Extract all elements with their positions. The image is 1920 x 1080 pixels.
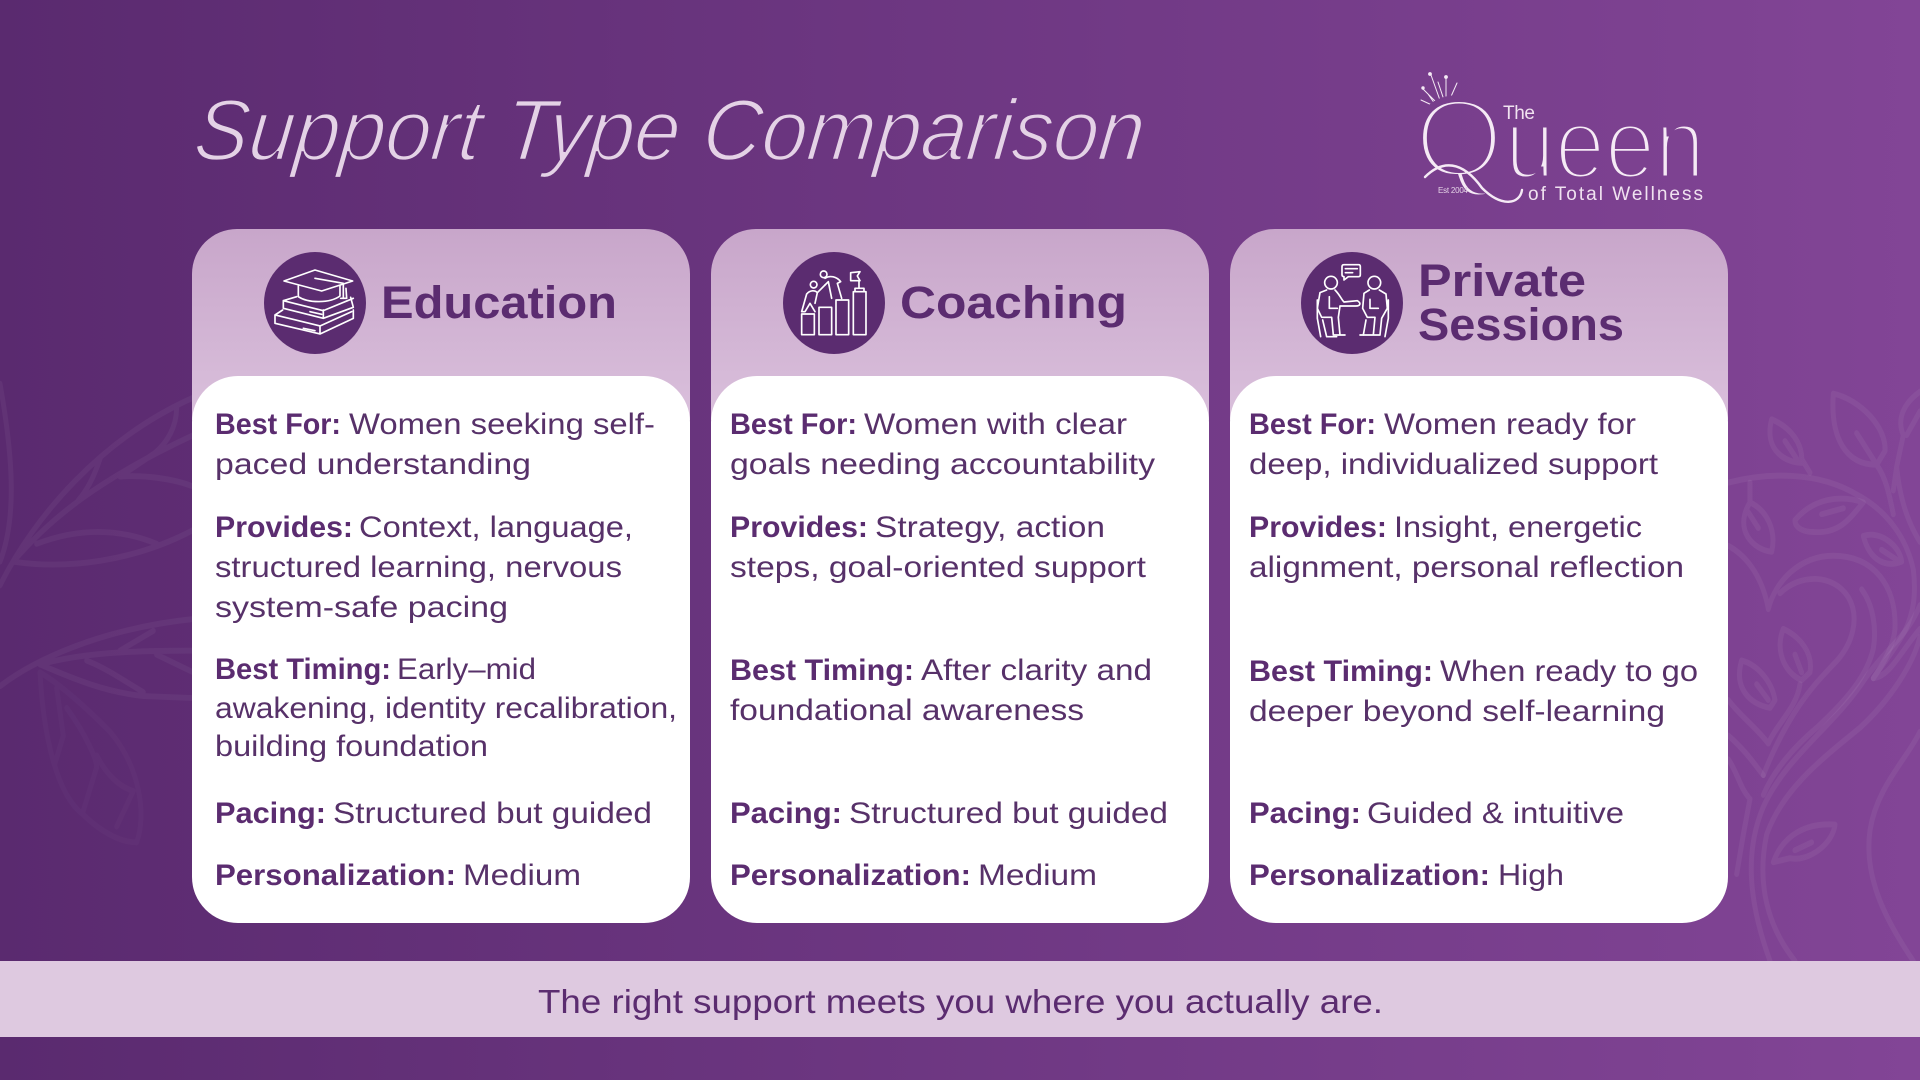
text block: private sessions details: Women ready for	[1384, 408, 1636, 441]
icon: books and graduation cap	[264, 252, 366, 354]
text block: private sessions details: deeper beyond self-learning	[1249, 695, 1665, 728]
logo wordmark Queen: Q	[1414, 76, 1504, 201]
text block: private sessions details: Provides:	[1249, 511, 1387, 544]
text block: education details: Personalization:	[215, 859, 456, 892]
text block: coaching details: foundational awareness	[730, 694, 1084, 727]
text block: coaching details: Best For:	[730, 408, 857, 441]
footer text: The right support meets you where you actually are.	[538, 983, 1383, 1020]
decorative botanical line art: right	[1728, 392, 1920, 961]
card body	[192, 376, 690, 923]
text block: private sessions details: Pacing:	[1249, 797, 1361, 830]
text block: private sessions details: alignment, personal reflection	[1249, 551, 1684, 584]
text block: education details: Best Timing:	[215, 653, 391, 686]
text block: education details: Women seeking self-	[349, 408, 655, 441]
text block: education details: paced understanding	[215, 448, 531, 481]
text block: coaching details: goals needing accountability	[730, 448, 1155, 481]
card header background	[711, 229, 1209, 420]
text block: education details	[215, 408, 677, 892]
text block: coaching details: Provides:	[730, 511, 868, 544]
footer banner	[0, 961, 1920, 1037]
text block: private sessions details: Personalization:	[1249, 859, 1490, 892]
text block: education details: awakening, identity recalibration,	[215, 692, 677, 725]
card body	[711, 376, 1209, 923]
logo tagline: of Total Wellness	[1528, 184, 1703, 205]
card header background	[192, 229, 690, 420]
logo est: Est 2004	[1438, 186, 1469, 195]
logo: The Queen of Total Wellness	[1414, 73, 1705, 205]
text block: coaching details: steps, goal-oriented support	[730, 551, 1147, 584]
logo swash	[1425, 165, 1522, 202]
logo The: The	[1503, 103, 1535, 124]
text block: education details: Context, language,	[359, 511, 633, 544]
card header background	[1230, 229, 1728, 420]
heading: Coaching: Coaching	[900, 277, 1127, 328]
text block: education details: Best For:	[215, 408, 341, 441]
text block: private sessions details: When ready to go	[1440, 655, 1698, 688]
heading: Private Sessions	[1418, 255, 1624, 350]
text block: private sessions details: Guided & intuitive	[1367, 797, 1624, 830]
text block: education details: Structured but guided	[333, 797, 652, 830]
text block: education details: Provides:	[215, 511, 353, 544]
text block: coaching details: Best Timing:	[730, 654, 914, 687]
text block: education details: Early–mid	[397, 653, 536, 686]
text block: education details: system-safe pacing	[215, 591, 508, 624]
panel: education	[192, 229, 690, 923]
text block: education details: structured learning, nervous	[215, 551, 622, 584]
text block: coaching details: Women with clear	[864, 408, 1127, 441]
heading: Education: Education	[381, 277, 617, 328]
text block: coaching details: Pacing:	[730, 797, 842, 830]
text block: private sessions details: Best Timing:	[1249, 655, 1433, 688]
card body	[1230, 376, 1728, 923]
text block: education details: Pacing:	[215, 797, 326, 830]
title: Support Type Comparison	[190, 82, 1150, 179]
panel: private sessions	[1230, 229, 1728, 923]
text block: private sessions details	[1249, 408, 1698, 892]
text block: private sessions details: Insight, energetic	[1394, 511, 1642, 544]
logo crown	[1421, 73, 1457, 106]
heading: Private Sessions: Sessions	[1418, 299, 1624, 350]
decorative botanical line art: left	[0, 384, 193, 842]
text block: coaching details: Medium	[978, 859, 1097, 892]
logo: The Queen of Total Wellness: ueen	[1505, 88, 1705, 200]
icon: climbing bars with flag	[783, 252, 885, 354]
icon: two people in conversation	[1301, 252, 1403, 354]
text block: private sessions details: Best For:	[1249, 408, 1376, 441]
text block: education details: Medium	[463, 859, 581, 892]
text block: coaching details	[730, 408, 1168, 892]
text block: education details: building foundation	[215, 730, 488, 763]
heading: Private Sessions: Private	[1418, 255, 1586, 306]
text block: coaching details: After clarity and	[921, 654, 1152, 687]
panel: coaching	[711, 229, 1209, 923]
text block: coaching details: Structured but guided	[849, 797, 1168, 830]
text block: coaching details: Strategy, action	[875, 511, 1105, 544]
text block: coaching details: Personalization:	[730, 859, 971, 892]
text block: private sessions details: High	[1498, 859, 1564, 892]
text block: private sessions details: deep, individualized support	[1249, 448, 1659, 481]
